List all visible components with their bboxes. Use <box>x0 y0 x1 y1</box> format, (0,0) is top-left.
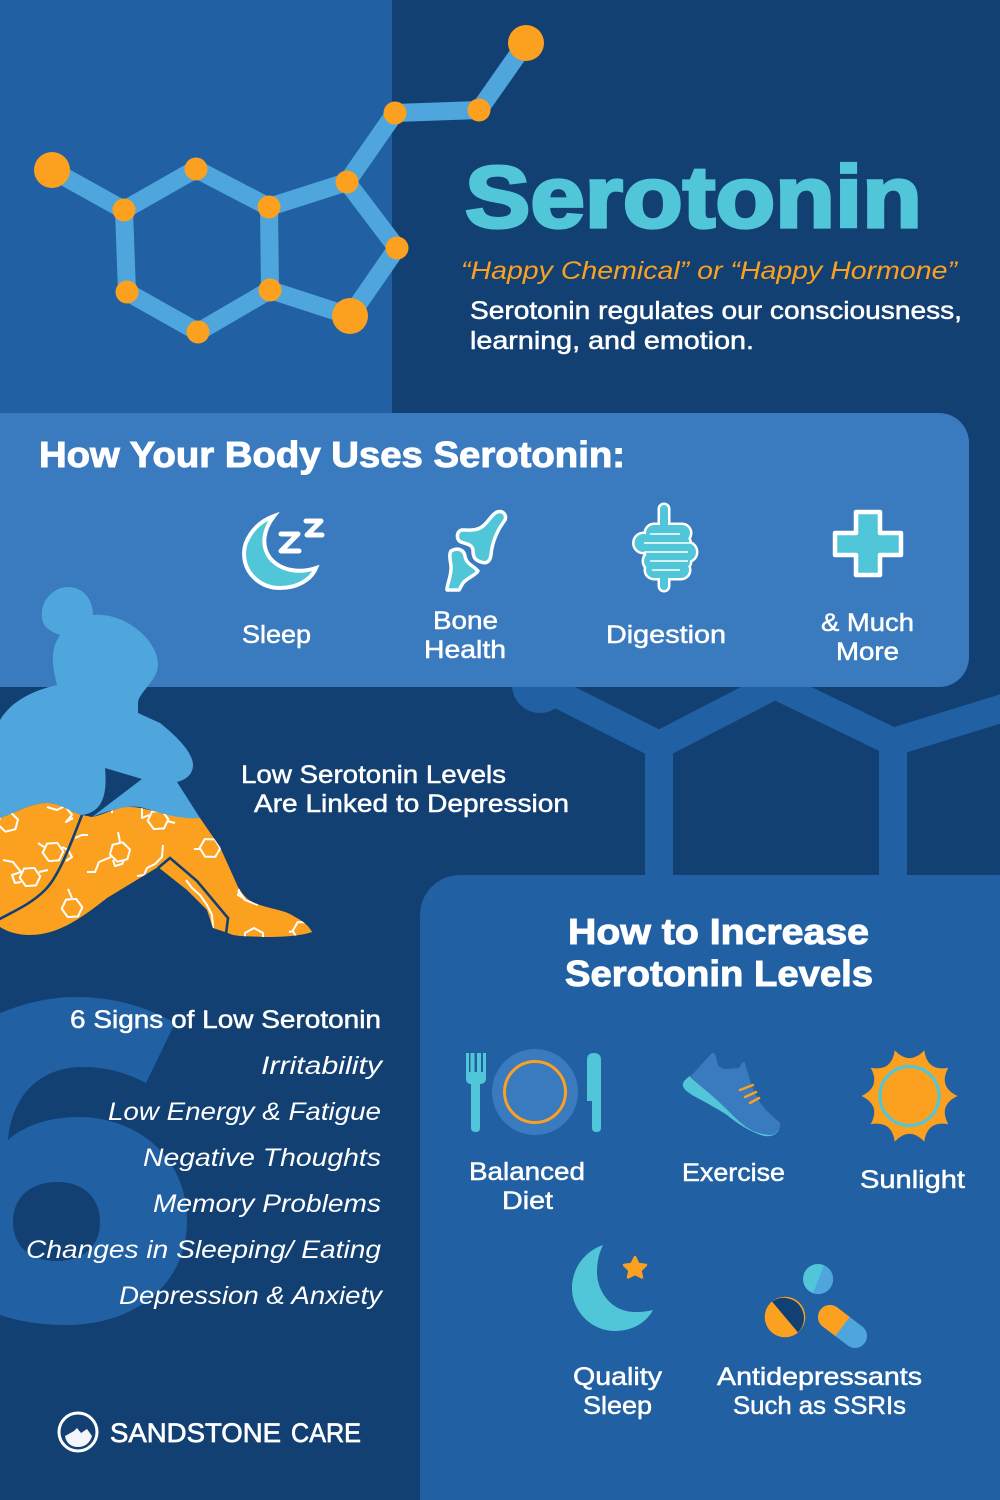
subtitle: “Happy Chemical” or “Happy Hormone” <box>461 257 959 285</box>
label <box>821 609 914 666</box>
hexagon lattice backdrop <box>512 657 1000 890</box>
label <box>469 1158 585 1215</box>
icon: pills <box>765 1264 855 1337</box>
statement: low serotonin and depression <box>241 761 569 818</box>
description: learning, and emotion. <box>470 327 754 355</box>
sign: Low Energy & Fatigue <box>108 1098 381 1126</box>
leg separators <box>0 815 228 934</box>
heading: How to Increase <box>568 911 869 952</box>
icon: running shoe <box>683 1053 780 1136</box>
legs <box>0 803 312 937</box>
big number 6 backdrop <box>0 997 187 1325</box>
icon: plate and cutlery <box>466 1049 601 1135</box>
panel: how your body uses serotonin <box>0 413 969 687</box>
label: Bone <box>433 607 498 635</box>
heading <box>565 911 873 994</box>
heading: Serotonin Levels <box>565 953 873 994</box>
icon: moon and star <box>572 1245 653 1331</box>
logo: sandstone care <box>59 1413 361 1451</box>
figure: seated person <box>0 587 320 948</box>
description: Serotonin regulates our consciousness, <box>470 297 962 325</box>
sign: Depression & Anxiety <box>119 1282 384 1310</box>
label <box>424 607 506 664</box>
panel: molecule backdrop <box>0 0 392 413</box>
logo wordmark: CARE <box>291 1418 361 1448</box>
label: Quality <box>573 1363 663 1391</box>
sign: Irritability <box>261 1052 384 1080</box>
list heading: 6 Signs of Low Serotonin <box>70 1006 381 1034</box>
description <box>470 297 962 355</box>
logo mark <box>59 1413 97 1451</box>
icon: plus cross <box>835 512 901 575</box>
icon: intestines <box>634 505 696 590</box>
label: More <box>836 638 899 666</box>
icon: sleep moon <box>244 516 322 588</box>
icon: sun <box>862 1050 958 1142</box>
icon: bone joint <box>447 512 506 590</box>
label: Sleep <box>583 1392 652 1420</box>
label: Such as SSRIs <box>733 1392 906 1420</box>
sign: Memory Problems <box>153 1190 381 1218</box>
statement: low serotonin and depression: Low Serotonin Levels <box>241 761 506 789</box>
label: Digestion <box>606 621 726 649</box>
label: Exercise <box>682 1159 785 1187</box>
logo wordmark <box>110 1418 361 1448</box>
sign: Negative Thoughts <box>143 1144 381 1172</box>
label <box>717 1363 922 1420</box>
label: Health <box>424 636 506 664</box>
statement: low serotonin and depression: Are Linked to Depression <box>254 790 569 818</box>
label: & Much <box>821 609 914 637</box>
serotonin molecule diagram <box>34 25 544 344</box>
logo wordmark: SANDSTONE <box>110 1418 281 1448</box>
list: 6 signs of low serotonin <box>26 1006 384 1310</box>
panel: how to increase serotonin <box>420 875 1000 1500</box>
label <box>573 1363 663 1420</box>
heading: How Your Body Uses Serotonin: <box>39 434 625 475</box>
sign: Changes in Sleeping/ Eating <box>26 1236 381 1264</box>
label: Antidepressants <box>717 1363 922 1391</box>
title: Serotonin <box>465 149 922 246</box>
torso and head <box>0 587 200 819</box>
label: Sunlight <box>860 1166 965 1194</box>
label: Sleep <box>242 621 311 649</box>
label: Diet <box>502 1187 553 1215</box>
label: Balanced <box>469 1158 585 1186</box>
